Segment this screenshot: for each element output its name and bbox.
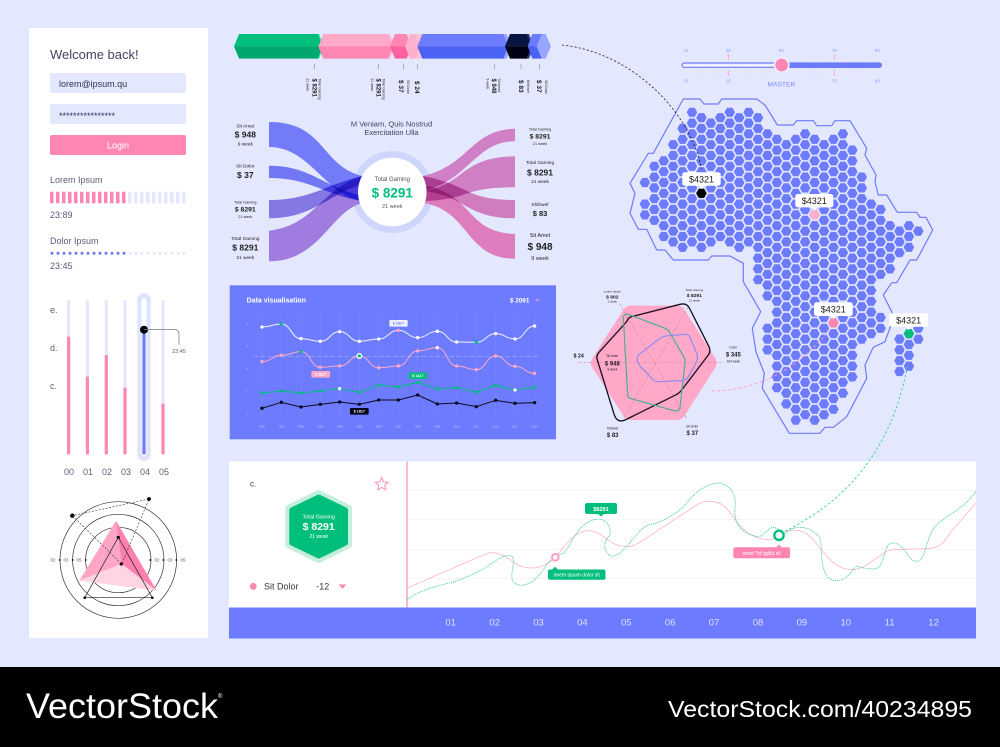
labels: ribbon bar rotated values: $ 83 xyxy=(517,80,524,93)
panel: login and stats sidebar xyxy=(29,28,208,638)
tag: green value: $8291 xyxy=(593,507,609,513)
bar chart: vertical sliders: 00 xyxy=(64,467,74,477)
chart: radial triangle radar: 03 xyxy=(63,558,69,563)
sankey title: M Veniam, Quis Nostrud xyxy=(351,120,432,128)
labels: ribbon bar rotated values: 21 week xyxy=(306,78,310,91)
chart axis labels: 2001 xyxy=(278,425,285,429)
chart axis labels: 2004 xyxy=(337,425,343,429)
chart: radial triangle radar: 05 xyxy=(76,558,82,563)
footer: watermark bar xyxy=(0,667,1000,747)
labels: ribbon bar rotated values: $ 948 xyxy=(490,78,496,94)
tag: pink caption: amet *fa*gg8ä sit xyxy=(743,551,781,557)
labels: ribbon bar rotated values: $ 37 xyxy=(397,80,404,93)
labels: ribbon bar rotated values: Sit Amet xyxy=(497,78,501,92)
bottom axis bar: 01 xyxy=(445,618,456,628)
line series: pink xyxy=(260,346,536,375)
left sankey labels: 9 week xyxy=(238,141,253,147)
legend: sit dolor: -12 xyxy=(316,582,329,592)
right sankey labels: 21 week xyxy=(533,142,547,146)
chart axis labels xyxy=(246,322,538,429)
button: login xyxy=(50,135,186,155)
chart: sankey flow xyxy=(231,120,554,262)
footer: watermark bar: VectorStock xyxy=(26,686,218,726)
center total gaming circle xyxy=(358,158,427,226)
chart: segmented ribbon bar xyxy=(234,34,551,59)
panel total value: $ 2091 xyxy=(510,297,530,304)
labels: ribbon bar rotated values: 21 week xyxy=(370,78,374,91)
chart: radial triangle radar: 02 xyxy=(154,558,160,563)
slider: master control: MASTER xyxy=(767,81,795,88)
left sankey labels: $ 37 xyxy=(237,170,254,180)
slider: master control: 90 xyxy=(875,79,880,84)
bottom axis bar: 04 xyxy=(577,618,588,628)
right sankey labels: $ 8291 xyxy=(530,134,551,140)
radar labels: $ 83 xyxy=(607,433,619,439)
chart: radial triangle radar xyxy=(50,497,186,618)
chart axis labels: 4 xyxy=(246,344,248,348)
slider: master control: 10 xyxy=(684,79,689,84)
button: login: Login xyxy=(107,140,129,150)
radar labels: Lorem Ipsum xyxy=(604,290,622,294)
progress: lorem ipsum xyxy=(50,175,187,220)
labels: ribbon bar rotated values: 9 week xyxy=(486,78,490,90)
chart: radial triangle radar: 05 xyxy=(180,558,186,563)
slider: master control: 75 xyxy=(832,79,837,84)
labels: ribbon bar rotated values: $ 8291 xyxy=(310,78,316,98)
radar labels: $ 24 xyxy=(573,353,584,359)
slider: master control: 90 xyxy=(875,48,880,53)
green hexagon total: 21 week xyxy=(309,534,329,540)
bottom axis bar: 05 xyxy=(621,618,632,628)
map tag: west xyxy=(682,172,721,189)
green hexagon total: $ 8291 xyxy=(303,521,335,533)
bar chart: vertical sliders: e. xyxy=(50,305,58,315)
labels: ribbon bar rotated values: $ 37 xyxy=(535,80,542,93)
summary label: c. xyxy=(250,480,256,488)
map tag: central: $4321 xyxy=(802,196,827,206)
input: password xyxy=(50,104,186,124)
footer: watermark bar: ® xyxy=(218,693,223,700)
radar labels: Total Gaming xyxy=(686,288,703,292)
chart: hexagon radar xyxy=(573,288,741,439)
progress: lorem ipsum: 23:89 xyxy=(50,210,73,220)
left sankey labels: Total Gaming xyxy=(234,200,256,204)
radar labels: 21 week xyxy=(689,299,700,303)
labels: ribbon bar rotated values: $ 8291 xyxy=(374,78,380,98)
green hexagon total xyxy=(288,493,349,560)
slider: master control: 25 xyxy=(726,48,731,53)
dashed connector: radar to map xyxy=(712,328,832,391)
progress: dolor ipsum: Dolor Ipsum xyxy=(50,236,99,246)
chart axis labels: 3 xyxy=(246,367,248,371)
bottom axis bar: 09 xyxy=(797,618,807,628)
map tag: south: $4321 xyxy=(821,304,846,314)
input: email: lorem@ipsum.qu xyxy=(59,79,127,89)
right sankey labels: $ 948 xyxy=(527,242,553,253)
right sankey labels xyxy=(526,128,554,262)
chart: radial triangle radar: 02 xyxy=(50,558,56,563)
chart axis labels: 2012 xyxy=(493,425,499,429)
right sankey labels: Total Gaming xyxy=(529,128,551,132)
chart axis labels: 2010 xyxy=(454,425,460,429)
green hexagon total: Total Gaming xyxy=(302,514,335,520)
center total gaming circle: $ 8291 xyxy=(372,186,413,200)
right sankey labels: 9 week xyxy=(531,256,549,262)
left sankey labels: $ 8291 xyxy=(235,206,256,214)
chart axis labels: 1 xyxy=(246,412,248,416)
bar chart: vertical sliders: 02 xyxy=(102,467,112,477)
labels: ribbon bar rotated values: Total Gaming xyxy=(318,78,322,100)
chart value tags: $ 1417 xyxy=(412,374,423,378)
left sankey labels: $ 948 xyxy=(235,130,256,140)
radar labels: 104 week xyxy=(727,360,741,364)
radar labels: $ 345 xyxy=(726,353,741,359)
slider: master control: 50 xyxy=(779,48,784,53)
chart value tags: $ 1817 xyxy=(354,410,365,414)
radar labels: 9 week xyxy=(607,368,618,372)
dashed connector: ribbon bar to map xyxy=(562,45,702,169)
progress: lorem ipsum: Lorem Ipsum xyxy=(50,175,103,185)
bar chart: vertical sliders: d. xyxy=(50,343,58,353)
radar labels: $ 902 xyxy=(606,295,619,301)
slider: master control xyxy=(682,48,882,88)
left sankey labels xyxy=(231,123,260,261)
bar chart: vertical sliders: 04 xyxy=(140,467,150,477)
chart value tags: $ 1817 xyxy=(315,373,326,377)
map tag: south xyxy=(814,302,853,319)
line series: black xyxy=(260,393,536,410)
legend: sit dolor: Sit Dolor xyxy=(264,582,299,592)
left sankey labels: Sit Amet xyxy=(236,123,255,129)
labels: ribbon bar rotated values: Khlhwef xyxy=(526,80,530,93)
left sankey labels: $ 8291 xyxy=(232,242,259,252)
progress: dolor ipsum: 23:45 xyxy=(50,261,73,271)
map: hexagon africa xyxy=(562,45,933,433)
left sankey labels: 21 week xyxy=(238,215,252,219)
right sankey labels: Khlhwef xyxy=(531,202,549,208)
map outline xyxy=(630,99,933,433)
right sankey labels: $ 8291 xyxy=(527,168,553,178)
chart axis labels: 2003 xyxy=(317,425,324,429)
map hexagon grid xyxy=(640,108,924,425)
chart axis labels: 2011 xyxy=(473,425,480,429)
radar labels: $ 8291 xyxy=(687,293,702,299)
bottom axis bar: 08 xyxy=(753,618,763,628)
center total gaming circle: 21 week xyxy=(382,204,403,210)
bar chart: vertical sliders: 03 xyxy=(121,467,131,477)
right sankey labels: Total Gaming xyxy=(526,160,554,166)
radar labels: Dolor xyxy=(730,346,737,350)
panel total value xyxy=(510,297,539,304)
tag: green value xyxy=(585,503,617,516)
right sankey labels: Sit Amet xyxy=(530,233,551,239)
chart axis labels: 2013 xyxy=(512,425,518,429)
line series: green xyxy=(260,381,536,395)
tag: green caption xyxy=(548,567,606,580)
heading: welcome back: Welcome back! xyxy=(50,47,139,62)
radar labels: Sit Dolor xyxy=(686,424,698,428)
bottom axis bar: 02 xyxy=(489,618,500,628)
bar chart: vertical sliders: 23:45 xyxy=(172,349,186,355)
left sankey labels: 21 week xyxy=(236,255,255,261)
slider: master control: 25 xyxy=(726,79,731,84)
left sankey labels: Sit Dolor xyxy=(236,164,255,170)
radar labels: Khlhwef xyxy=(607,426,618,430)
left sankey labels: Total Gaming xyxy=(231,236,260,242)
footer: watermark bar: VectorStock.com/40234895 xyxy=(668,696,972,722)
bar chart: vertical sliders: 01 xyxy=(83,467,93,477)
bottom axis bar: 10 xyxy=(841,618,851,628)
bottom axis bar: 03 xyxy=(533,618,544,628)
chart axis labels: 2008 xyxy=(415,425,421,429)
bottom axis bar: 12 xyxy=(928,618,939,628)
panel heading: Data visualisation xyxy=(247,297,306,304)
radar labels xyxy=(573,288,741,439)
slider: master control: 10 xyxy=(684,48,689,53)
tag: pink caption xyxy=(733,544,790,558)
map tag: island xyxy=(889,313,928,330)
line series: white xyxy=(260,322,536,344)
chart axis labels: 2002 xyxy=(298,425,304,429)
right sankey labels: $ 83 xyxy=(533,209,547,218)
chart axis labels: 2006 xyxy=(376,425,382,429)
right sankey labels: 21 week xyxy=(531,179,550,185)
bottom axis bar: 11 xyxy=(885,618,895,628)
chart axis labels: 2 xyxy=(246,389,248,393)
radar labels: $ 948 xyxy=(605,361,620,367)
bar chart: vertical sliders: 05 xyxy=(159,467,169,477)
chart axis labels: 2000 xyxy=(259,425,265,429)
bottom axis bar xyxy=(229,608,976,638)
tag: green caption: lorem ipsum dolor sit xyxy=(554,573,600,579)
sankey title: Exercitation Ulla xyxy=(364,128,419,137)
icon: star xyxy=(375,478,388,490)
legend: sit dolor xyxy=(250,582,346,592)
center total gaming circle: Total Gaming xyxy=(375,177,410,183)
map tag: island: $4321 xyxy=(896,316,921,326)
radar labels: $ 37 xyxy=(687,431,699,437)
chart axis labels: 2009 xyxy=(434,425,441,429)
radar labels: 1 week xyxy=(608,300,618,304)
bottom axis bar: 06 xyxy=(665,618,675,628)
bar chart: vertical sliders: c. xyxy=(50,381,57,391)
slider: master control: 75 xyxy=(832,48,837,53)
panel: bottom wide chart xyxy=(229,462,976,638)
chart axis labels: 2005 xyxy=(356,425,363,429)
labels: ribbon bar rotated values xyxy=(306,64,548,100)
chart: radial triangle radar: 03 xyxy=(167,558,173,563)
labels: ribbon bar rotated values: Sit Dolor xyxy=(544,80,548,95)
bar chart: vertical sliders xyxy=(50,293,186,477)
labels: ribbon bar rotated values: Sit Dolor xyxy=(406,80,410,95)
line chart: pink and green curves xyxy=(407,483,976,600)
chart value tags: $ 1817 xyxy=(393,322,404,326)
chart value tags xyxy=(311,320,427,415)
bottom axis bar: 07 xyxy=(709,618,719,628)
map tag: central xyxy=(795,194,833,210)
input: email xyxy=(50,73,186,93)
chart axis labels: 2007 xyxy=(395,425,402,429)
labels: ribbon bar rotated values: Total Gaming xyxy=(382,78,386,100)
labels: ribbon bar rotated values: $ 24 xyxy=(413,81,420,94)
radar labels: Sit Amet xyxy=(606,354,618,358)
panel: data visualisation line chart xyxy=(230,285,556,439)
map tag: west: $4321 xyxy=(689,174,714,184)
connector: bottom chart to island xyxy=(781,363,908,533)
input: password: **************** xyxy=(59,111,116,121)
progress: dolor ipsum xyxy=(50,236,186,271)
chart axis labels: 2014 xyxy=(532,425,538,429)
chart axis labels: 5 xyxy=(246,322,248,326)
